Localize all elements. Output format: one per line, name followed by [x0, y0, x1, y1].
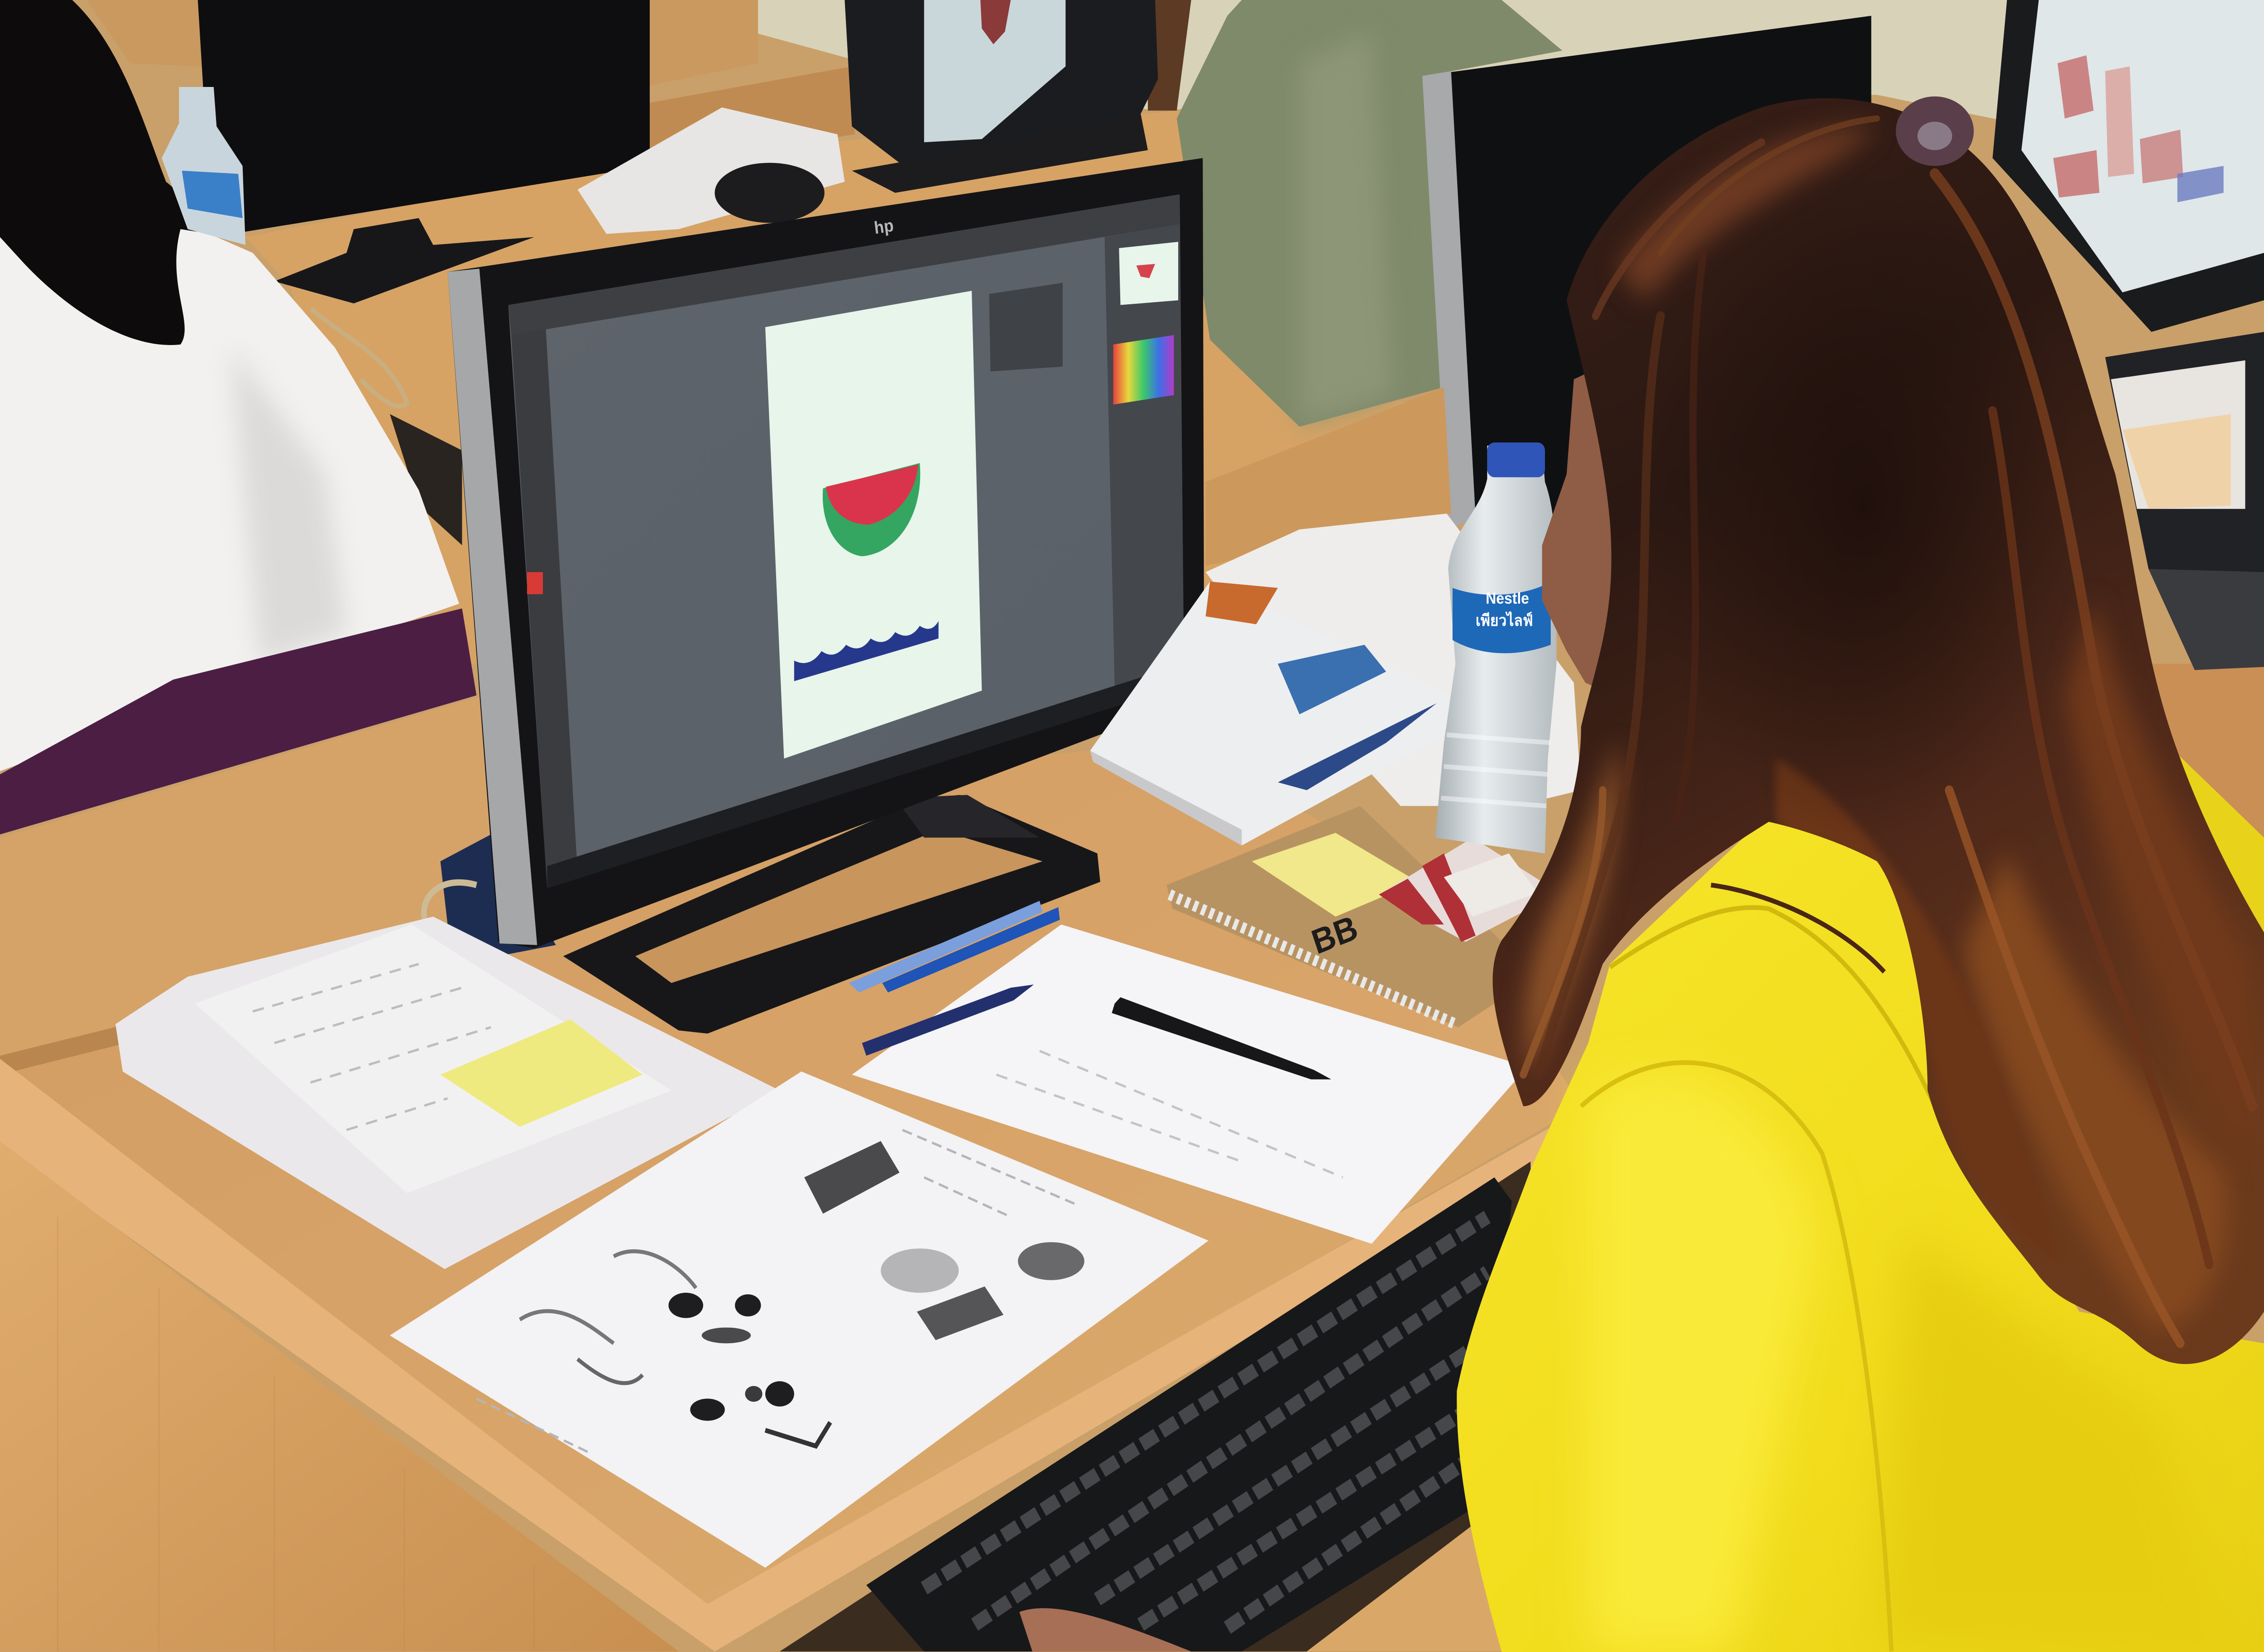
taskbar: [547, 664, 1184, 888]
main monitor: [448, 158, 1204, 948]
wood partition: [0, 387, 1451, 1059]
hair colour shading, clipped to the hair shape: [1523, 119, 2252, 1343]
right panel: [1104, 225, 1184, 687]
booklet thumbnails: [804, 1141, 900, 1214]
monitor stand: [563, 795, 1100, 1033]
screen canvas: [508, 194, 1184, 888]
person in green shirt: [1177, 0, 1562, 427]
spiral notebook: [1167, 806, 1509, 1027]
woman: face: [1542, 355, 1631, 703]
papers and mouse on back desk: [578, 107, 844, 234]
keyboard tray shelf: [780, 1162, 1542, 1652]
desk surface: [0, 743, 1581, 1612]
waves illustration: [794, 621, 939, 681]
collar fold: [1610, 908, 1935, 1106]
monitor: far right: [1993, 0, 2264, 332]
textbook: [1090, 581, 1448, 845]
booklet text lines: [476, 1130, 1076, 1454]
silver side: [448, 269, 537, 945]
monitor: back centre: [844, 0, 1158, 193]
monitor: back right: [1422, 16, 1871, 529]
watermelon illustration: [823, 463, 920, 556]
red swatch: [527, 572, 543, 594]
water bottle, back: [162, 87, 245, 245]
left tool panel: [511, 329, 578, 888]
thumbnail: [1119, 242, 1178, 305]
hair strands: [1523, 119, 2252, 1343]
laptop: [2105, 332, 2264, 670]
sticky note: [441, 1019, 643, 1127]
woman: hair: [1493, 98, 2264, 1364]
properties panel: [989, 283, 1063, 371]
hair clip: [1896, 96, 1974, 166]
top toolbar: [508, 194, 1180, 335]
navy pencil: [862, 984, 1034, 1056]
water bottle: [1435, 442, 1557, 853]
sleeve fold: [1581, 1062, 1891, 1652]
yellow sticky note on notebook: [1252, 833, 1418, 917]
purple chair: [0, 609, 476, 835]
desk front edge and panel: [0, 1059, 1574, 1652]
monitor: back left: [198, 0, 650, 303]
monitor bezel: [448, 158, 1204, 948]
panda sketches: [520, 1251, 830, 1446]
snack packet: [1379, 838, 1559, 942]
spiral notebook: BB: [1307, 908, 1362, 962]
left stack of papers: [115, 917, 780, 1269]
black pencil: [1112, 997, 1331, 1080]
right handwritten paper: [852, 925, 1528, 1244]
front booklet: [390, 1071, 1209, 1568]
woman: yellow shirt: [1457, 743, 2264, 1652]
water bottle: Nestle: [1486, 590, 1529, 607]
monitor logo: hp: [873, 216, 895, 238]
inner handwritten sheet: [195, 925, 672, 1193]
blue pens: [849, 901, 1060, 993]
white papers behind the book: [1206, 514, 1581, 806]
water bottle: เพียวไลฟ์: [1476, 611, 1533, 629]
artboard: [765, 291, 982, 759]
keyboard: [866, 1177, 1512, 1652]
hand on keyboard: [1019, 1608, 1191, 1652]
colour picker: [1113, 335, 1174, 404]
person on left: white shirt: [0, 206, 459, 771]
cord and pouch behind monitor: [424, 835, 578, 1011]
loose strand across the collar: [1711, 885, 1884, 972]
person on left: black hair: [0, 0, 231, 345]
